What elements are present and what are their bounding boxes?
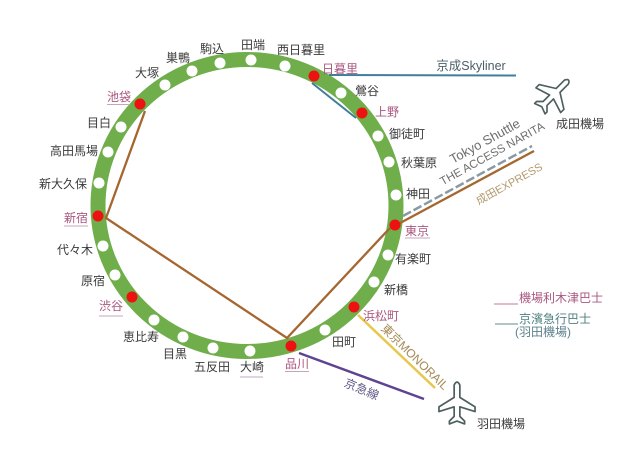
station names: 田端 xyxy=(241,38,265,52)
transfer stations xyxy=(92,70,400,352)
station names: 西日暮里 xyxy=(277,43,325,57)
Tokyo Monorail label: 東京MONORAIL xyxy=(378,322,452,393)
Yamanote line ring xyxy=(98,60,396,352)
legend: 機場利木津巴士 xyxy=(519,291,603,305)
Narita Express label: 成田EXPRESS xyxy=(474,160,545,208)
station names: 有楽町 xyxy=(395,252,431,266)
station names: 神田 xyxy=(406,186,430,201)
The Access Narita label: THE ACCESS NARITA xyxy=(438,121,547,188)
Narita airport name: 成田機場 xyxy=(556,117,604,131)
station names: 目黒 xyxy=(163,347,187,361)
station names: 新橋 xyxy=(384,283,408,297)
route labels: 京成Skyliner xyxy=(436,59,506,73)
station names: 五反田 xyxy=(194,360,230,374)
Skyliner line xyxy=(312,75,516,118)
legend xyxy=(494,291,603,339)
legend: 京濱急行巴士 xyxy=(519,311,591,326)
station names: 秋葉原 xyxy=(401,156,437,170)
station names: 新大久保 xyxy=(39,177,87,191)
icon: plane Haneda xyxy=(439,382,475,424)
station names: 代々木 xyxy=(57,243,93,257)
station name underlines xyxy=(64,104,430,377)
station names: 御徒町 xyxy=(389,126,425,141)
transfer station names: 浜松町 xyxy=(363,309,399,323)
station names: 大塚 xyxy=(135,66,159,80)
transfer station names: 品川 xyxy=(285,357,309,371)
station names: 原宿 xyxy=(81,274,105,288)
transfer station names: 新宿 xyxy=(64,211,88,225)
station names: 恵比寿 xyxy=(123,330,159,344)
transfer station names: 東京 xyxy=(405,224,429,238)
station names: 巣鴨 xyxy=(166,51,190,65)
station names: 高田馬場 xyxy=(50,144,98,158)
transfer station names: 日暮里 xyxy=(322,62,358,76)
Tokyo Monorail line xyxy=(358,315,435,388)
Keikyu line xyxy=(299,353,424,399)
Keikyu label: 京急線 xyxy=(342,375,381,403)
transfer station names: 上野 xyxy=(375,105,399,119)
Tokyo Shuttle dashed line xyxy=(403,146,532,216)
transfer station names: 渋谷 xyxy=(99,299,123,313)
icon: plane Narita xyxy=(527,68,581,121)
white stations xyxy=(94,54,402,356)
station names: 鶯谷 xyxy=(355,83,379,98)
legend: (羽田機場) xyxy=(515,325,571,339)
transfer station names: 池袋 xyxy=(107,90,131,104)
Narita Express line xyxy=(389,151,534,229)
station names xyxy=(39,38,437,374)
connector lines between hubs xyxy=(106,111,389,338)
station names: 目白 xyxy=(87,115,111,130)
station names: 駒込 xyxy=(200,42,224,56)
Haneda airport name: 羽田機場 xyxy=(477,417,525,431)
Tokyo Shuttle label: Tokyo Shuttle xyxy=(447,116,523,167)
station names: 大崎 xyxy=(240,360,264,374)
station names: 田町 xyxy=(332,335,356,349)
transfer station names xyxy=(64,62,429,371)
